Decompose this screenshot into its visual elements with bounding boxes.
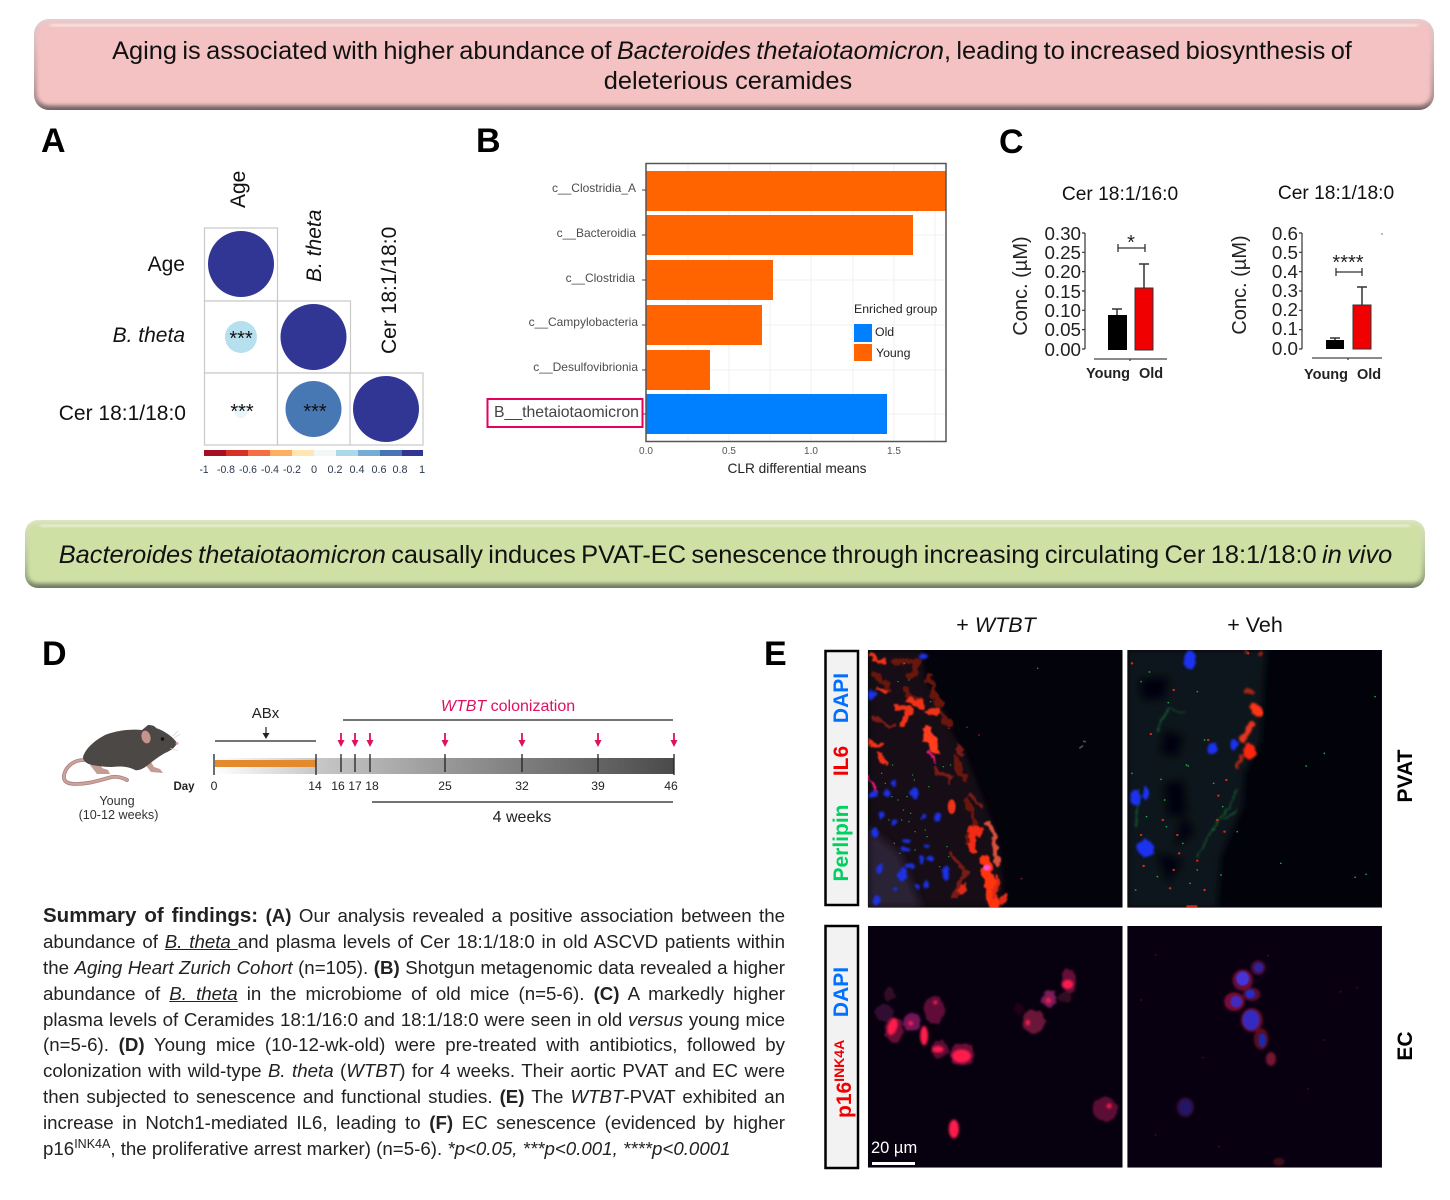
text block: summary of findings: plasma levels of Ceramides 18:1/16:0 and 18:1/18:0 were seen in old versus young mice: [43, 1009, 785, 1030]
text block: summary of findings: increase in Notch1-mediated IL6, leading to (F) EC senescence (evidenced by higher: [43, 1112, 785, 1133]
chart: Cer 18:1/16:0: 0.25: [1044, 242, 1081, 263]
text block: summary of findings: Summary of findings: (A) Our analysis revealed a positive association between the: [43, 904, 785, 927]
colour scale: 0.2: [328, 464, 342, 476]
x-axis: CLR differential means: [728, 461, 867, 476]
colour scale: 0.6: [372, 464, 386, 476]
chart: Cer 18:1/18:0: Cer 18:1/18:0: [1278, 183, 1394, 204]
day labels: 46: [664, 779, 678, 793]
micrograph: Veh EC p16: [1127, 926, 1382, 1168]
day labels: 25: [438, 779, 452, 793]
text block: summary of findings: p16INK4A, the proliferative arrest marker) (n=5-6). *p<0.05, ***p<0.001, ****p<0.0001: [43, 1137, 731, 1159]
day labels: 18: [365, 779, 379, 793]
chart: Cer 18:1/16:0: *: [1127, 232, 1135, 254]
chart: Cer 18:1/16:0: Young: [1086, 366, 1130, 382]
micrograph: WTBT EC p16: [868, 926, 1123, 1168]
chart: Cer 18:1/18:0: 0.5: [1272, 242, 1298, 263]
WTBT colonization bracket: WTBT colonization: [441, 698, 575, 715]
scale bar: [871, 1139, 917, 1165]
banner: aging and ceramides headline: [34, 19, 1434, 110]
y-axis labels: c__Clostridia_A: [552, 181, 636, 195]
x-axis: 0.0: [639, 446, 653, 457]
chart: Cer 18:1/18:0: Conc. (µM): [1229, 235, 1251, 335]
stain legend: EC row: DAPI: [830, 967, 853, 1017]
highlighted taxon label: B__thetaiotaomicron: [494, 404, 639, 421]
colour scale: 0.8: [392, 464, 408, 476]
row labels: Cer 18:1/18:0: [59, 402, 186, 425]
column labels: [227, 171, 401, 354]
colour scale: 0.4: [350, 464, 364, 476]
x-axis: 1.5: [887, 446, 901, 457]
chart: Cer 18:1/18:0: 0.0: [1272, 338, 1298, 359]
colour scale: -0.4: [261, 464, 279, 476]
panel D: colonization timeline: [42, 635, 678, 826]
chart: Cer 18:1/18:0: 0.6: [1272, 223, 1298, 244]
row labels: [59, 253, 186, 425]
plot frame: [646, 164, 946, 442]
plot gridlines: [646, 164, 946, 441]
banner: aging and ceramides headline: deleterious ceramides: [604, 67, 852, 95]
chart: Cer 18:1/16:0: 0.00: [1044, 339, 1081, 360]
row labels: PVAT: [1394, 749, 1417, 802]
x-axis: 0.5: [722, 446, 736, 457]
chart: Cer 18:1/18:0: 0.3: [1272, 280, 1298, 301]
colour scale: -0.6: [239, 464, 257, 476]
panel E: immunofluorescence micrographs: [764, 613, 1417, 1168]
day labels: 17: [348, 779, 362, 793]
day labels: 14: [308, 779, 322, 793]
micrograph: WTBT PVAT: [868, 650, 1123, 908]
chart: Cer 18:1/18:0: Old: [1357, 367, 1381, 383]
chart: Cer 18:1/16:0: 0.05: [1044, 319, 1081, 340]
column labels: Age: [227, 171, 250, 208]
panel letter E: E: [764, 635, 787, 673]
text block: summary of findings: colonization with wild-type B. theta (WTBT) for 4 weeks. Their aortic PVAT and EC were: [43, 1060, 785, 1081]
mouse caption: Young: [99, 794, 135, 808]
x-axis: 1.0: [804, 446, 818, 457]
four-week bracket: 4 weeks: [493, 809, 551, 826]
panel C: ceramide bar charts: [999, 123, 1394, 383]
chart: Cer 18:1/16:0: 0.30: [1044, 223, 1081, 244]
day labels: 32: [515, 779, 529, 793]
y-axis labels: c__Campylobacteria: [529, 315, 638, 329]
chart: Cer 18:1/18:0: 0.4: [1272, 261, 1298, 282]
day labels: 39: [591, 779, 605, 793]
x-axis: [639, 446, 901, 476]
banner: causal headline: [25, 520, 1425, 588]
row labels: [1394, 749, 1417, 1061]
column headers: [956, 613, 1283, 637]
stain legend: PVAT row: DAPI: [830, 673, 853, 723]
colour scale: [200, 450, 425, 476]
day labels: Day: [173, 781, 195, 793]
colour scale: -1: [200, 464, 208, 476]
column labels: B. theta: [303, 210, 326, 282]
colour scale: 0: [311, 464, 317, 476]
banner: causal headline: Bacteroides thetaiotaomicron causally induces PVAT-EC senescence through increasing circulating Cer 18:1/18:0 in vivo: [59, 541, 1392, 569]
legend: Young: [876, 346, 911, 360]
legend: [854, 302, 938, 361]
correlation circles: ***: [229, 328, 253, 350]
correlation circles: [208, 231, 419, 442]
day labels: 0: [211, 779, 218, 793]
chart: Cer 18:1/16:0: 0.15: [1044, 281, 1081, 302]
micrograph: Veh PVAT: [1127, 650, 1382, 908]
colour scale: -0.8: [217, 464, 235, 476]
chart: Cer 18:1/18:0: 0.2: [1272, 299, 1298, 320]
chart: Cer 18:1/18:0: [1229, 183, 1394, 383]
legend: Old: [875, 325, 894, 339]
chart: Cer 18:1/18:0: ****: [1332, 252, 1364, 274]
legend: Enriched group: [854, 302, 938, 316]
text block: summary of findings: the Aging Heart Zurich Cohort (n=105). (B) Shotgun metagenomic data revealed a higher: [43, 957, 785, 978]
chart: Cer 18:1/18:0: 0.1: [1272, 318, 1298, 339]
banner: aging and ceramides headline: Aging is associated with higher abundance of Bacteroides thetaiotaomicron, leading to increased biosynthesis of: [112, 37, 1353, 65]
stain legend: EC row: p16: [833, 1082, 856, 1118]
correlation circles: ***: [303, 401, 327, 423]
stain legend: EC row: INK4A: [831, 1040, 847, 1082]
scale bar: 20 µm: [871, 1139, 917, 1157]
panel A: correlation matrix: [41, 122, 425, 476]
y-axis labels: c__Clostridia: [566, 271, 635, 285]
ABx treatment bracket: [215, 705, 316, 741]
chart: Cer 18:1/18:0: Young: [1304, 367, 1348, 383]
column headers: + WTBT: [956, 613, 1038, 637]
row labels: B. theta: [113, 324, 185, 347]
column headers: + Veh: [1227, 613, 1283, 637]
stain legend: PVAT row: IL6: [830, 746, 853, 776]
colonization arrows: [338, 733, 678, 747]
y-axis labels: [529, 181, 638, 374]
text block: summary of findings: abundance of B. theta in the microbiome of old mice (n=5-6). (C) A markedly higher: [43, 983, 785, 1004]
panel letter D: D: [42, 635, 67, 673]
y-axis labels: c__Desulfovibrionia: [533, 360, 638, 374]
icon: mouse: [64, 725, 180, 784]
panel letter C: C: [999, 123, 1024, 161]
day labels: 16: [331, 779, 345, 793]
timeline bar: [214, 754, 674, 775]
day labels: [173, 779, 678, 793]
row labels: EC: [1394, 1031, 1417, 1061]
ABx treatment bracket: ABx: [252, 705, 280, 722]
text block: summary of findings: (n=5-6). (D) Young mice (10-12-wk-old) were pre-treated with antibiotics, followed by: [43, 1034, 785, 1055]
text block: summary of findings: abundance of B. theta and plasma levels of Cer 18:1/18:0 in old ASCVD patients within: [43, 931, 785, 952]
chart: Cer 18:1/16:0: [1010, 184, 1178, 382]
panel B: CLR differential bar chart: [476, 122, 946, 476]
text block: summary of findings: then subjected to senescence and functional studies. (E) The WTBT-PVAT exhibited an: [43, 1086, 785, 1107]
mouse caption: (10-12 weeks): [79, 808, 158, 822]
chart: Cer 18:1/16:0: Conc. (µM): [1010, 236, 1032, 336]
row labels: Age: [148, 253, 185, 276]
chart: Cer 18:1/16:0: 0.20: [1044, 261, 1081, 282]
mouse caption: [79, 794, 158, 822]
y-axis labels: c__Bacteroidia: [557, 226, 636, 240]
highlighted taxon label: [488, 399, 642, 427]
chart: Cer 18:1/16:0: Old: [1139, 366, 1163, 382]
horizontal bars: [646, 171, 946, 434]
panel letter B: B: [476, 122, 501, 160]
panel letter A: A: [41, 122, 66, 160]
stain legend: EC row: [826, 926, 858, 1168]
text block: summary of findings: [43, 904, 785, 1159]
colour scale: -0.2: [283, 464, 301, 476]
chart: Cer 18:1/16:0: Cer 18:1/16:0: [1062, 184, 1178, 205]
stain legend: PVAT row: Perlipin: [830, 804, 853, 882]
column labels: Cer 18:1/18:0: [378, 227, 401, 354]
correlation circles: ***: [230, 401, 254, 423]
chart: Cer 18:1/16:0: 0.10: [1044, 300, 1081, 321]
stain legend: PVAT row: [826, 651, 858, 905]
colour scale: 1: [419, 464, 425, 476]
correlation grid: [204, 228, 423, 445]
